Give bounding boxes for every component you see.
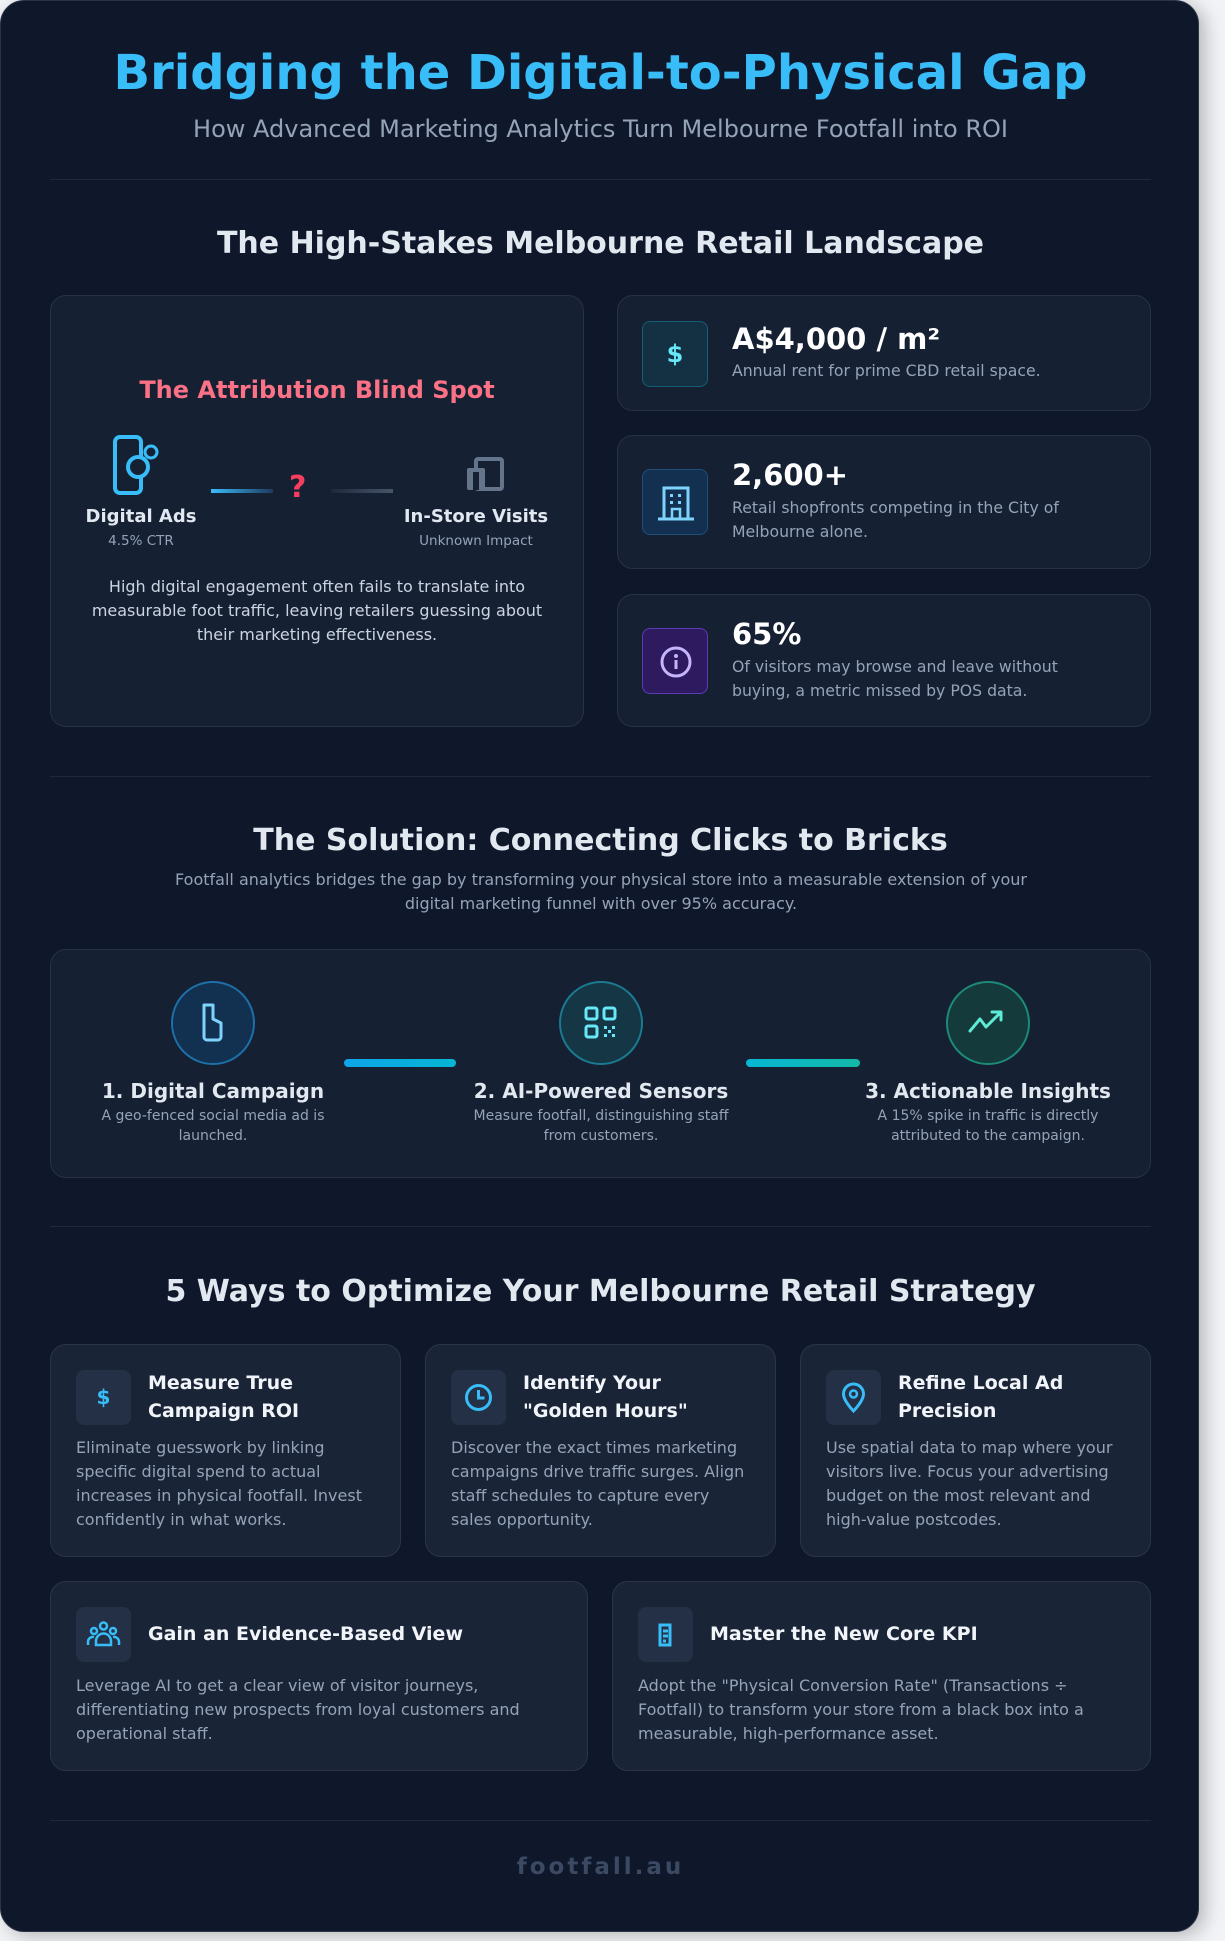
card: core KPI: Adopt the "Physical Conversion Rate" (Transactions ÷ Footfall) to transform your store from a black box into a measurable, high-performance asset.: [638, 1676, 1084, 1743]
connector 1: [344, 1059, 456, 1067]
step 1 icon: [171, 981, 255, 1065]
blind spot title: The Attribution Blind Spot: [139, 376, 495, 404]
icon: building: [642, 469, 708, 535]
icon: clock: [451, 1370, 506, 1425]
blind spot text: High digital engagement often fails to translate into measurable foot traffic, leaving retailers guessing about their marketing effectiveness.: [92, 577, 542, 644]
icon: people: [76, 1607, 131, 1662]
title: Bridging the Digital-to-Physical Gap: [114, 45, 1088, 101]
card: golden hours: Discover the exact times marketing campaigns drive traffic surges. Align staff schedules to capture every sales opportunity.: [451, 1438, 744, 1529]
label: in-store visits: [404, 506, 548, 549]
label: in-store visits: In-Store Visits: [404, 506, 548, 527]
card: golden hours: [425, 1344, 776, 1557]
icon: dollar: [76, 1370, 131, 1425]
icon: receipt: [638, 1607, 693, 1662]
solution description: Footfall analytics bridges the gap by transforming your physical store into a measurable extension of your digital marketing funnel with over 95% accuracy.: [175, 870, 1027, 913]
step 3 text: 3. Actionable Insights: [865, 1079, 1111, 1103]
stat card: browsers: 65%: [732, 617, 801, 651]
step 2 icon: [559, 981, 643, 1065]
card: core KPI: Master the New Core KPI: [710, 1623, 978, 1645]
step 3 text: A 15% spike in traffic is directly attributed to the campaign.: [878, 1108, 1098, 1144]
connector 2: [746, 1059, 860, 1067]
card: evidence-based view: [50, 1581, 588, 1771]
step 2 text: Measure footfall, distinguishing staff from customers.: [474, 1108, 728, 1144]
step 1 text: [102, 1079, 324, 1144]
icon: store: [467, 457, 504, 491]
card: local ad precision: [800, 1344, 1151, 1557]
card: core KPI: [612, 1581, 1151, 1771]
stat card: browsers: Of visitors may browse and leave without buying, a metric missed by POS data.: [732, 657, 1058, 700]
icon: dollar: $: [97, 1385, 110, 1409]
label: digital ads: 4.5% CTR: [108, 533, 174, 549]
arrow: gap with question mark: ?: [289, 470, 306, 505]
icon: info: [642, 628, 708, 694]
subtitle: How Advanced Marketing Analytics Turn Melbourne Footfall into ROI: [193, 115, 1008, 143]
card: ROI: Eliminate guesswork by linking specific digital spend to actual increases in physical footfall. Invest confidently in what works.: [76, 1438, 362, 1529]
label: in-store visits: Unknown Impact: [419, 533, 533, 549]
stat card: rent: Annual rent for prime CBD retail space.: [732, 361, 1041, 380]
step 1 text: A geo-fenced social media ad is launched.: [102, 1108, 324, 1144]
stat card: shopfronts: Retail shopfronts competing in the City of Melbourne alone.: [732, 498, 1059, 541]
stat card: rent: A$4,000 / m²: [732, 322, 940, 356]
step 3 text: [865, 1079, 1111, 1144]
card: ROI: Campaign ROI: [148, 1400, 299, 1422]
card: ROI: [50, 1344, 401, 1557]
step 3 icon: [946, 981, 1030, 1065]
panel: process flow: [50, 949, 1151, 1178]
heading: 5 ways: 5 Ways to Optimize Your Melbourne Retail Strategy: [165, 1274, 1036, 1309]
card: golden hours: Identify Your: [523, 1372, 661, 1394]
label: digital ads: Digital Ads: [86, 506, 196, 527]
stat card: rent: [617, 295, 1151, 411]
icon: dollar: [642, 321, 708, 387]
stat card: shopfronts: 2,600+: [732, 458, 848, 492]
card: evidence-based view: Gain an Evidence-Based View: [148, 1623, 463, 1645]
heading: landscape: The High-Stakes Melbourne Retail Landscape: [217, 226, 984, 261]
icon: phone: [113, 435, 158, 495]
card: local ad precision: Precision: [898, 1400, 996, 1422]
card: local ad precision: Use spatial data to map where your visitors live. Focus your advertising budget on the most relevant and high-value postcodes.: [826, 1438, 1112, 1529]
panel: attribution blind spot: [50, 295, 584, 727]
icon: dollar: $: [667, 340, 683, 368]
card: evidence-based view: Leverage AI to get a clear view of visitor journeys, differentiating new prospects from loyal customers and operational staff.: [76, 1676, 520, 1743]
arrow: gap with question mark: [211, 470, 393, 505]
step 2 text: [474, 1079, 729, 1144]
footer: footfall.au: [517, 1854, 684, 1880]
label: digital ads: [86, 506, 196, 549]
card: local ad precision: Refine Local Ad: [898, 1372, 1063, 1394]
stat card: shopfronts: [617, 435, 1151, 569]
icon: pin: [826, 1370, 881, 1425]
card: golden hours: "Golden Hours": [523, 1400, 688, 1422]
heading: solution: The Solution: Connecting Clicks to Bricks: [253, 823, 948, 858]
card: ROI: Measure True: [148, 1372, 293, 1394]
stat card: browsers: [617, 594, 1151, 727]
step 1 text: 1. Digital Campaign: [102, 1079, 324, 1103]
step 2 text: 2. AI-Powered Sensors: [474, 1079, 728, 1103]
